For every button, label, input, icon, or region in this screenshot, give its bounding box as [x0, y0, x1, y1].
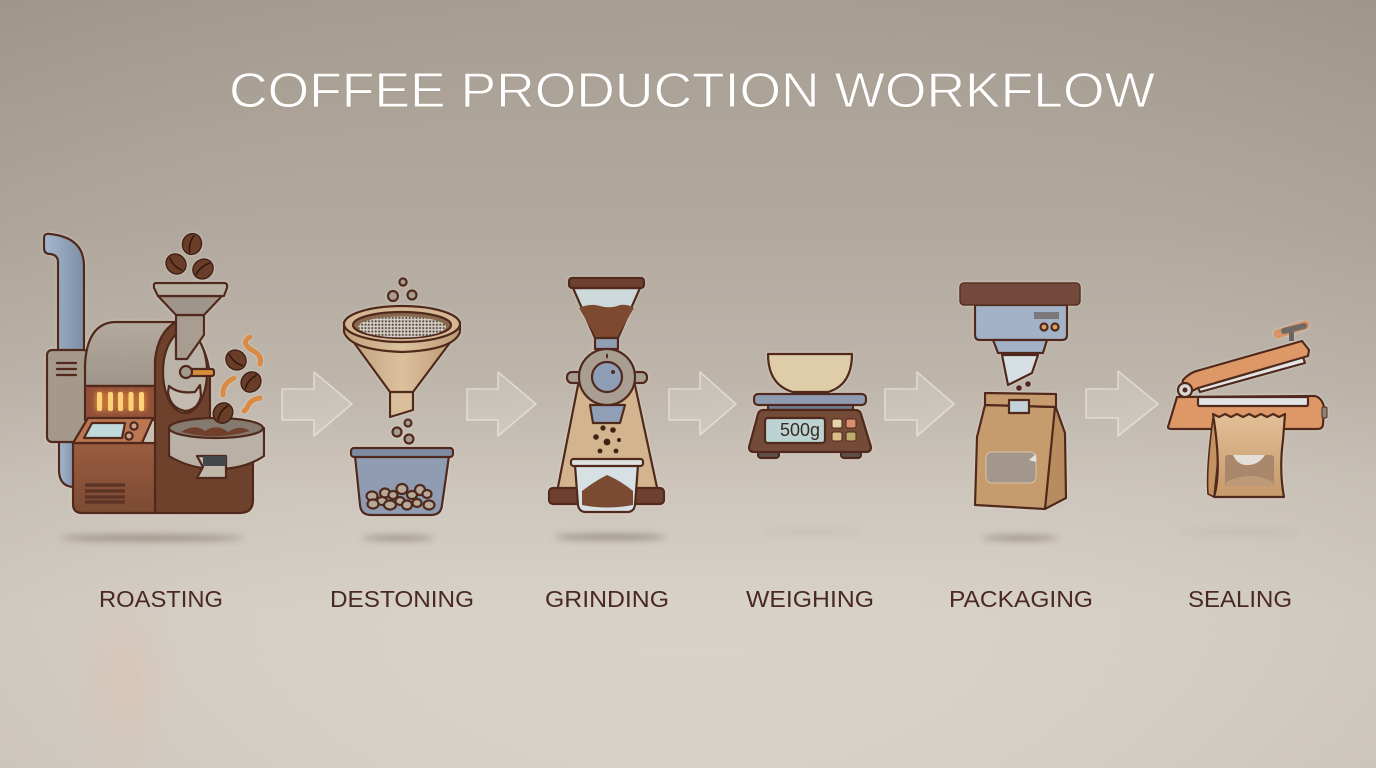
panel: destoning — [344, 278, 460, 515]
panel: packaging — [960, 283, 1080, 509]
icon: heater bars — [96, 392, 145, 411]
label: sealing: SEALING — [1188, 586, 1292, 612]
icon: scale feet — [758, 451, 861, 458]
arrow: grinding to weighing — [669, 372, 736, 435]
floor shadows — [60, 531, 1300, 541]
icon: side box — [47, 350, 89, 442]
icon: chimney pipe — [44, 234, 84, 487]
arrow: packaging to sealing — [1086, 371, 1158, 436]
label: roasting: ROASTING — [99, 586, 223, 612]
icon: collection bin — [351, 448, 453, 515]
icon: hopper — [154, 283, 227, 359]
icon: bean hopper — [569, 278, 644, 349]
display: weight readout: 500g — [780, 420, 820, 440]
panel: sealing — [1168, 325, 1327, 497]
icon: ground coffee cup — [571, 459, 643, 512]
icon: falling stones top — [388, 278, 416, 301]
icon: sealer arm — [1180, 341, 1309, 397]
arrow: destoning to grinding — [467, 372, 536, 436]
icon: machine body — [73, 322, 253, 513]
icon: scale buttons — [832, 419, 856, 441]
label: weighing: WEIGHING — [746, 586, 874, 612]
arrow: roasting to destoning — [282, 372, 352, 436]
icon: coffee beans — [162, 231, 265, 427]
icon: control panel — [73, 418, 153, 443]
icon: grinder base — [549, 385, 664, 504]
icon: scale bowl — [768, 354, 852, 392]
icon: sealer handle knob — [1278, 325, 1305, 341]
panel: grinding — [549, 278, 664, 512]
icon: filling machine — [960, 283, 1080, 391]
icon: sealed pouch — [1208, 414, 1285, 497]
icon: scale platform — [754, 394, 866, 410]
icon: falling stones middle — [392, 420, 414, 444]
label: packaging: PACKAGING — [949, 586, 1093, 612]
icon: cooling tray — [169, 418, 264, 478]
icon: sealer hinge — [1178, 383, 1192, 397]
title: COFFEE PRODUCTION WORKFLOW — [229, 64, 1156, 118]
icon: scale body — [749, 410, 871, 452]
icon: grinder head — [567, 349, 647, 423]
label: grinding: GRINDING — [545, 586, 669, 612]
arrow: weighing to packaging — [885, 372, 954, 436]
icon: sealer base — [1168, 396, 1327, 429]
panel: roasting — [44, 231, 265, 513]
label: destoning: DESTONING — [330, 586, 474, 612]
icon: drum door — [163, 331, 214, 413]
icon: funnel sieve — [344, 306, 460, 417]
panel: weighing — [749, 354, 871, 458]
icon: coffee bag — [975, 393, 1066, 509]
icon: heat swirls — [223, 337, 261, 411]
